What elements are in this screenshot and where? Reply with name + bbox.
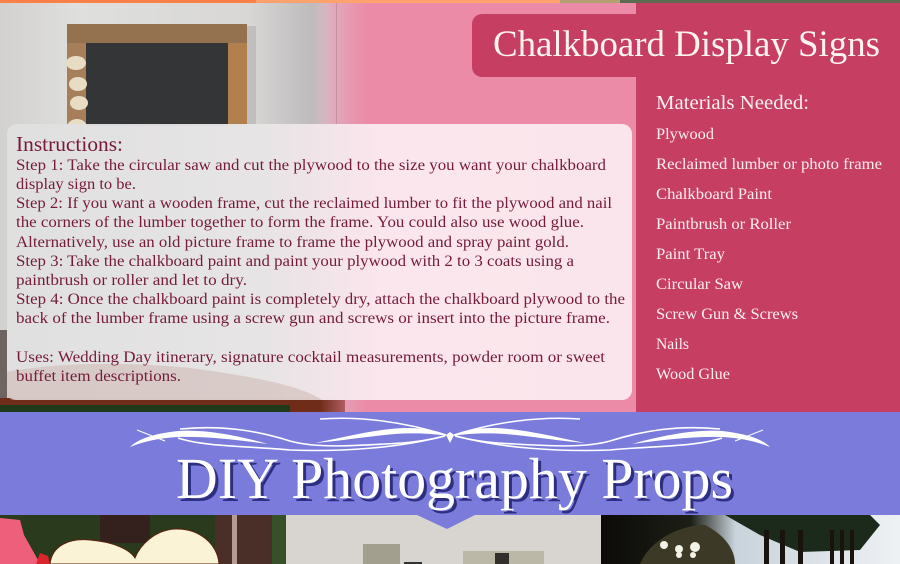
instructions panel: display sign to be. (16, 176, 136, 193)
materials list: Screw Gun & Screws (656, 306, 798, 323)
bottom photo: trees and white flowers (601, 515, 900, 564)
materials list: Paintbrush or Roller (656, 216, 792, 233)
instructions panel: Instructions: (16, 132, 123, 156)
instructions panel: Alternatively, use an old picture frame to frame the plywood and spray paint gold. (16, 234, 569, 251)
materials list: Plywood (656, 126, 714, 143)
rug (0, 330, 7, 400)
bottom photo: white wall with decor (286, 515, 601, 564)
materials list: Chalkboard Paint (656, 186, 773, 203)
elephants (66, 56, 88, 124)
materials list: Wood Glue (656, 366, 730, 383)
instructions panel: Uses: Wedding Day itinerary, signature cocktail measurements, powder room or sweet (16, 349, 606, 366)
chalkboard surface (86, 43, 228, 126)
instructions panel: Step 1: Take the circular saw and cut the plywood to the size you want your chalkboard (16, 157, 606, 174)
title banner (472, 14, 900, 77)
instructions panel: paintbrush or roller and let to dry. (16, 272, 247, 289)
section title: DIY Photography Props (179, 449, 736, 514)
instructions panel: Step 2: If you want a wooden frame, cut the reclaimed lumber to fit the plywood and nail (16, 195, 612, 212)
materials list: Nails (656, 336, 689, 353)
instructions panel: back of the lumber frame using a screw gun and screws or insert into the picture frame. (16, 310, 610, 327)
frame (67, 43, 86, 124)
materials list: Materials Needed: (656, 92, 809, 114)
materials list (656, 92, 882, 383)
materials list: Circular Saw (656, 276, 744, 293)
photo: chalkboard leaning on a wall (0, 3, 358, 412)
materials list: Paint Tray (656, 246, 725, 263)
instructions panel: the corners of the lumber together to form the frame. You could also use wood glue. (16, 214, 584, 231)
instructions panel (7, 124, 632, 400)
ornament: swirl flourish (130, 418, 770, 450)
materials column (636, 3, 900, 412)
section title: DIY Photography Props (176, 446, 733, 511)
instructions panel: Step 3: Take the chalkboard paint and paint your plywood with 2 to 3 coats using a (16, 253, 574, 270)
top colour strip (0, 0, 900, 3)
blue section banner (0, 412, 900, 529)
instructions panel: buffet item descriptions. (16, 368, 181, 385)
pink background panel (0, 3, 640, 412)
cushion seen through panel (7, 364, 322, 400)
bottom photo: hearts on hedge (0, 515, 286, 564)
materials list: Reclaimed lumber or photo frame (656, 156, 882, 173)
instructions panel: Step 4: Once the chalkboard paint is completely dry, attach the chalkboard plywood to the (16, 291, 625, 308)
title banner: Chalkboard Display Signs (493, 24, 880, 65)
